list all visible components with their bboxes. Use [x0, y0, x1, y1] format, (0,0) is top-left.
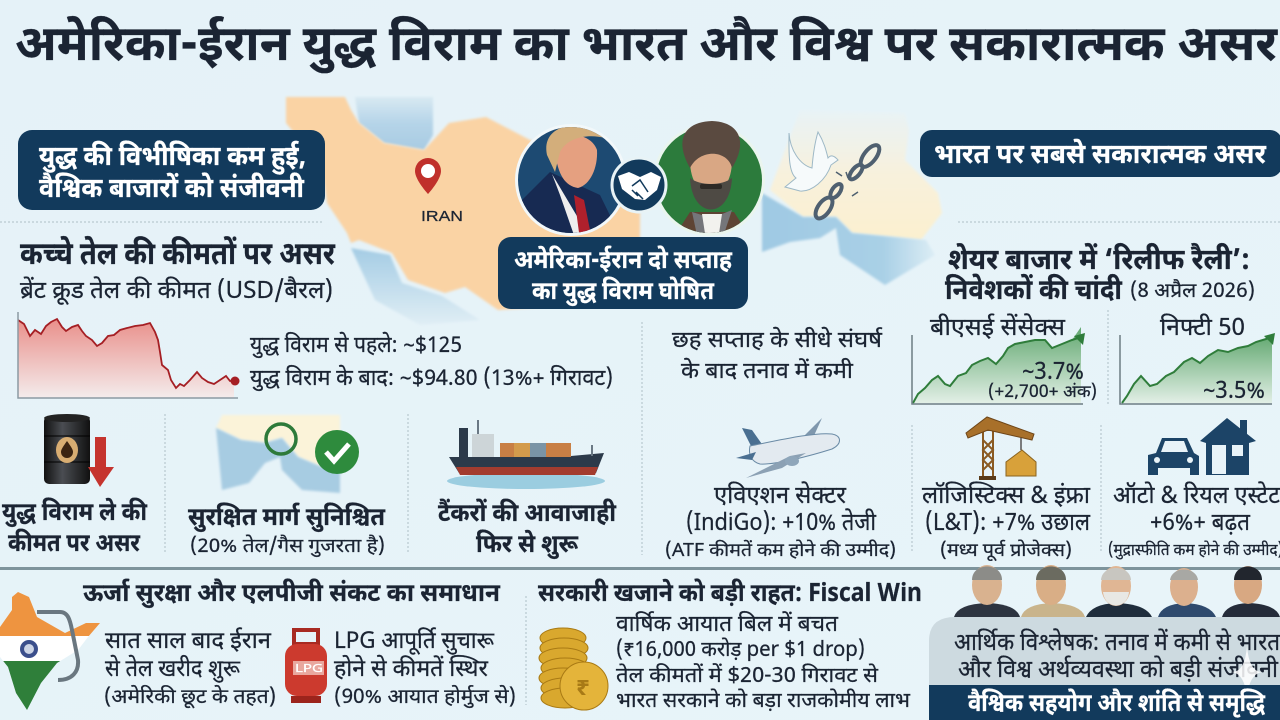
- heading: crude oil: [20, 236, 336, 308]
- panel: analyst quote: और विश्व अर्थव्यवस्था को बड़ी संजीवनी: [958, 655, 1279, 687]
- heading: stock market: (8 अप्रैल 2026): [1130, 277, 1255, 306]
- text: logistics: (L&T): +7% उछाल: [925, 508, 1091, 540]
- callout: right banner: भारत पर सबसे सकारात्मक असर: [934, 138, 1267, 175]
- icon: dove: [785, 132, 838, 191]
- text: oil price figures: [250, 331, 613, 394]
- heading: crude oil: कच्चे तेल की कीमतों पर असर: [20, 236, 336, 277]
- callout: left banner: वैश्विक बाजारों को संजीवनी: [39, 172, 305, 209]
- text: logistics: लॉजिस्टिक्स & इंफ्रा: [922, 481, 1091, 513]
- text: ceasefire price effect: [2, 497, 148, 562]
- portrait: US leader: [515, 124, 627, 240]
- text: fiscal details: भारत सरकाने को बड़ा राजकोमीय लाभ: [616, 688, 911, 716]
- text: auto and real estate: [1108, 481, 1280, 562]
- icon: airplane: [736, 418, 840, 478]
- heading: stock market: शेयर बाजार में ‘रिलीफ रैली’:: [948, 242, 1250, 281]
- heading: stock market: निवेशकों की चांदी: [945, 272, 1123, 311]
- icon: LPG cylinder: LPG: [295, 663, 323, 677]
- text: safe passage: [188, 502, 385, 560]
- text: ceasefire price effect: कीमत पर असर: [8, 528, 141, 562]
- text: aviation sector: एविएशन सेक्टर: [714, 481, 847, 513]
- text: safe passage: सुरक्षित मार्ग सुनिश्चित: [188, 502, 385, 536]
- text: LPG supply: LPG आपूर्ति सुचारू: [334, 627, 495, 658]
- callout: ceasefire announcement: [498, 237, 748, 310]
- text: LPG supply: होने से कीमतें स्थिर: [334, 655, 489, 686]
- icon: car and house: [1148, 418, 1256, 475]
- icon: handshake: [612, 158, 666, 212]
- text: auto and real estate: +6%+ बढ़त: [1150, 508, 1251, 540]
- icon: rupee coins: [539, 628, 608, 710]
- chart: BSE Sensex: ~3.7%: [1022, 357, 1084, 389]
- icon: oil barrel with down arrow: [44, 414, 114, 487]
- text: logistics: [922, 481, 1091, 564]
- map: Iran and Gulf region: [286, 97, 942, 325]
- chart: Nifty 50: निफ्टी 50: [1160, 313, 1245, 345]
- text: safe passage: (20% तेल/गैस गुजरता है): [190, 534, 385, 560]
- text: oil purchase from Iran: से तेल खरीद शुरू: [105, 655, 241, 686]
- text: oil purchase from Iran: [104, 627, 276, 712]
- icon: rupee coins: ₹: [576, 673, 590, 705]
- callout: ceasefire announcement: का युद्ध विराम घोषित: [532, 276, 714, 310]
- chart: Nifty 50: ~3.5%: [1203, 376, 1265, 408]
- text: tanker movement: [438, 498, 617, 563]
- text: aviation sector: (IndiGo): +10% तेजी: [686, 508, 877, 540]
- text: IRAN: IRAN: [421, 208, 463, 225]
- chart: BSE Sensex: [912, 313, 1097, 404]
- text: oil purchase from Iran: सात साल बाद ईरान: [105, 627, 272, 658]
- text: tension reduced: [672, 326, 883, 387]
- text: logistics: (मध्य पूर्व प्रोजेक्स): [940, 539, 1072, 564]
- text: tanker movement: टैंकरों की आवाजाही: [438, 498, 617, 532]
- title: अमेरिका-ईरान युद्ध विराम का भारत और विश्व पर सकारात्मक असर: [15, 15, 1278, 80]
- heading: stock market: [945, 242, 1255, 311]
- text: fiscal details: [616, 611, 911, 716]
- callout: ceasefire announcement: अमेरिका-ईरान दो सप्ताह: [514, 245, 733, 279]
- icon: sparkle: [1232, 646, 1262, 698]
- text: tension reduced: छह सप्ताह के सीधे संघर्ष: [672, 326, 883, 356]
- text: oil price figures: युद्ध विराम से पहले: ~$125: [250, 331, 462, 361]
- text: tension reduced: के बाद तनाव में कमी: [681, 357, 853, 387]
- panel: analyst quote: [929, 617, 1280, 687]
- icon: broken chain: [812, 142, 883, 221]
- chart: BSE Sensex: बीएसई सेंसेक्स: [930, 313, 1066, 345]
- icon: Hormuz strait with check: [216, 415, 359, 493]
- text: Brent subtitle: ब्रेंट क्रूड तेल की कीमत (USD/बैरल): [20, 276, 333, 308]
- group: portraits of analysts: [954, 565, 1280, 617]
- portrait: Iranian leader: [653, 121, 765, 240]
- icon: LPG cylinder: [285, 630, 327, 703]
- text: ceasefire price effect: युद्ध विराम ले की: [2, 497, 148, 531]
- text: aviation sector: (ATF कीमतें कम होने की उम्मीद): [665, 539, 896, 564]
- text: tanker movement: फिर से शुरू: [476, 529, 579, 563]
- text: fiscal details: वार्षिक आयात बिल में बचत: [616, 611, 838, 640]
- heading: energy security: ऊर्जा सुरक्षा और एलपीजी संकट का समाधान: [83, 578, 501, 612]
- text: oil price figures: युद्ध विराम के बाद: ~$94.80 (13%+ गिरावट): [250, 364, 613, 394]
- text: fiscal details: (₹16,000 करोड़ per $1 drop): [616, 637, 865, 665]
- chart: BSE Sensex: (+2,700+ अंक): [988, 382, 1097, 404]
- text: aviation sector: [665, 481, 896, 564]
- icon: India tricolour map: [0, 590, 102, 713]
- text: LPG supply: [334, 627, 516, 712]
- icon: cargo ship: [447, 420, 605, 489]
- callout: left banner: युद्ध की विभीषिका कम हुई,: [39, 140, 306, 177]
- text: oil purchase from Iran: (अमेरिकी छूट के तहत): [104, 684, 276, 712]
- chart: Nifty 50: [1120, 313, 1275, 408]
- text: LPG supply: (90% आयात होर्मुज से): [334, 684, 516, 712]
- heading: fiscal win: सरकारी खजाने को बड़ी राहत: Fiscal Win: [538, 578, 922, 612]
- callout: left banner: [18, 130, 325, 210]
- icon: map pin: [415, 158, 441, 194]
- icon: construction crane: [966, 417, 1036, 480]
- chart: Brent crude price: [18, 312, 240, 398]
- text: fiscal details: तेल कीमतों में $20-30 गिरावट से: [616, 663, 879, 691]
